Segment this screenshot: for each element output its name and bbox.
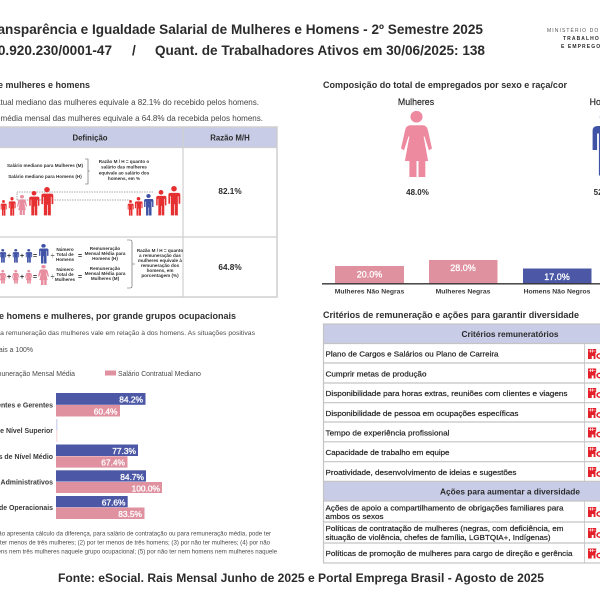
bar chart: grupos: 67.6% — [102, 497, 126, 507]
footer: fonte: Fonte: eSocial. Rais Mensal Junho de 2025 e Portal Emprega Brasil - Agosto de 2025 — [58, 571, 544, 585]
diagram: remuneração média: Número — [56, 267, 74, 272]
diagram: remuneração média: Total de — [56, 252, 74, 257]
bar chart: raça/cor: Mulheres Negras — [436, 288, 491, 296]
diagram: remuneração média: + — [7, 253, 11, 260]
bar chart: grupos: 60.4% — [94, 406, 118, 416]
bar chart: grupos: 100.0% — [132, 483, 161, 493]
diagram: remuneração média: Mulheres — [55, 277, 76, 282]
table: critérios — [323, 324, 600, 563]
table: critérios: Plano de Cargos e Salários ou Plano de Carreira — [326, 350, 499, 358]
bar chart: grupos: 84.2% — [119, 394, 144, 404]
table: definição e razão: 64.8% — [218, 263, 242, 272]
diagram: remuneração média: Mulheres (M) — [91, 276, 120, 281]
heading: critérios: Critérios de remuneração e ações para garantir diversidade — [323, 310, 579, 320]
panel: diferença de remuneração — [0, 80, 277, 297]
bar chart: grupos — [0, 393, 162, 519]
panel: grupos ocupacionais — [0, 311, 278, 556]
diagram: salário mediano: equivale ao salário dos — [99, 170, 150, 176]
table: critérios: ambos os sexos — [326, 512, 384, 521]
table: critérios: Capacidade de trabalho em equipe — [326, 448, 450, 457]
table: critérios: Proatividade, desenvolvimento de ideias e sugestões — [326, 468, 517, 477]
diagram: remuneração média: Remuneração — [90, 266, 120, 271]
bar chart: raça/cor: 17.0% — [544, 272, 570, 282]
diagram: remuneração média: Mensal Média para — [85, 251, 126, 256]
logo: ministério: E EMPREGO — [561, 44, 600, 50]
diagram: remuneração média: Homens (H) — [92, 256, 118, 261]
diagram: remuneração média: + — [20, 253, 24, 260]
value: mulheres: 48.0% — [406, 188, 429, 197]
title: / — [132, 43, 136, 58]
table: critérios: Cumprir metas de produção — [326, 370, 426, 378]
diagram: remuneração média: = — [33, 253, 37, 260]
icons: sinalização dos critérios — [588, 349, 600, 558]
icon: homem — [593, 111, 600, 176]
table: critérios: Políticas de contratação de mulheres (negras, com deficiência, em — [326, 524, 564, 533]
table: critérios: Políticas de promoção de mulheres para cargo de direção e gerência — [326, 549, 573, 558]
diagram: remuneração média: = — [33, 274, 37, 281]
bar chart: grupos: 84.7% — [120, 472, 145, 482]
bar chart: raça/cor: 20.0% — [357, 270, 382, 280]
diagram: remuneração média: ÷ — [51, 253, 55, 260]
icon: mulher — [401, 111, 432, 177]
diagram: salário mediano: homens, em % — [108, 176, 140, 181]
bar chart: raça/cor: 28.0% — [450, 263, 476, 273]
bar chart: raça/cor: Homens Não Negros — [524, 288, 591, 296]
bar chart: grupos: 77.3% — [112, 446, 137, 456]
diagram: remuneração média: ÷ — [51, 274, 55, 281]
table: definição e razão: Razão M/H — [210, 134, 250, 142]
table: critérios: Tempo de experiência profissional — [326, 428, 450, 438]
diagram: remuneração média: + — [7, 274, 11, 281]
diagram: remuneração média: Razão M / H = quanto — [137, 248, 183, 253]
table: critérios: Critérios remuneratórios — [462, 330, 559, 339]
diagram: salário mediano: salário das mulheres — [101, 164, 147, 170]
label: mulheres: Mulheres — [398, 97, 435, 107]
diagram: remuneração média: homens, em — [147, 268, 173, 273]
text block: notas — [0, 530, 278, 556]
panel: composição — [322, 80, 600, 296]
diagram: remuneração média: = — [78, 253, 82, 260]
title: Quant. de Trabalhadores Ativos em 30/06/2025: 138 — [155, 43, 485, 58]
diagram: remuneração média: Remuneração — [90, 246, 120, 251]
diagram: salário mediano: Salário mediano para Homens (H) — [8, 174, 82, 179]
table: critérios: Ações para aumentar a diversidade — [440, 488, 581, 496]
diagram: salário mediano: Salário mediano para Mulheres (M) — [7, 163, 84, 168]
text block: explicação — [0, 330, 256, 354]
table: definição e razão: 82.1% — [218, 187, 242, 196]
diagram: remuneração média: Mensal Média para — [85, 271, 126, 276]
table: critérios: Disponibilidade de pessoa em ocupações específicas — [326, 409, 519, 418]
diagram: remuneração média — [0, 240, 183, 288]
logo: ministério: TRABALHO — [563, 36, 600, 42]
diagram: remuneração média: Homens — [56, 257, 75, 262]
diagram: remuneração média: porcentagem (%) — [141, 273, 179, 278]
diagram: remuneração média: Total de — [56, 272, 74, 277]
table: critérios: situação de violência, chefes de família, LGBTQIA+, Indígenas) — [326, 533, 551, 542]
panel: critérios de remuneração — [323, 310, 600, 563]
bar chart: grupos: 83.5% — [118, 509, 143, 519]
diagram: salário mediano — [1, 159, 180, 216]
logo: ministério — [547, 27, 600, 50]
heading: composição: Composição do total de empregados por sexo e raça/cor — [323, 80, 567, 90]
diagram: remuneração média: + — [20, 274, 24, 281]
table: definição e razão: Definição — [72, 134, 108, 142]
title — [0, 22, 485, 58]
bar chart: raça/cor: Mulheres Não Negras — [335, 288, 404, 296]
table: critérios: Disponibilidade para horas extras, reuniões com clientes e viagens — [326, 389, 568, 398]
logo: ministério: MINISTÉRIO DO — [547, 27, 599, 34]
table: critérios: Ações de apoio a compartilhamento de obrigações familiares para — [326, 504, 564, 512]
bar chart: raça/cor — [322, 260, 600, 296]
legend — [0, 370, 201, 378]
diagram: remuneração média: = — [78, 274, 82, 281]
legend: Salário Contratual Mediano — [118, 371, 201, 378]
bar chart: grupos: 67.4% — [101, 457, 126, 467]
diagram: remuneração média: Número — [56, 247, 74, 252]
diagram: remuneração média: mulheres equivale à — [138, 258, 182, 263]
diagram: remuneração média: a remuneração das — [139, 253, 181, 258]
diagram: salário mediano: Razão M / H = quanto o — [99, 159, 149, 164]
table: definição e razão — [0, 127, 277, 297]
diagram: remuneração média: remuneração dos — [141, 263, 180, 268]
